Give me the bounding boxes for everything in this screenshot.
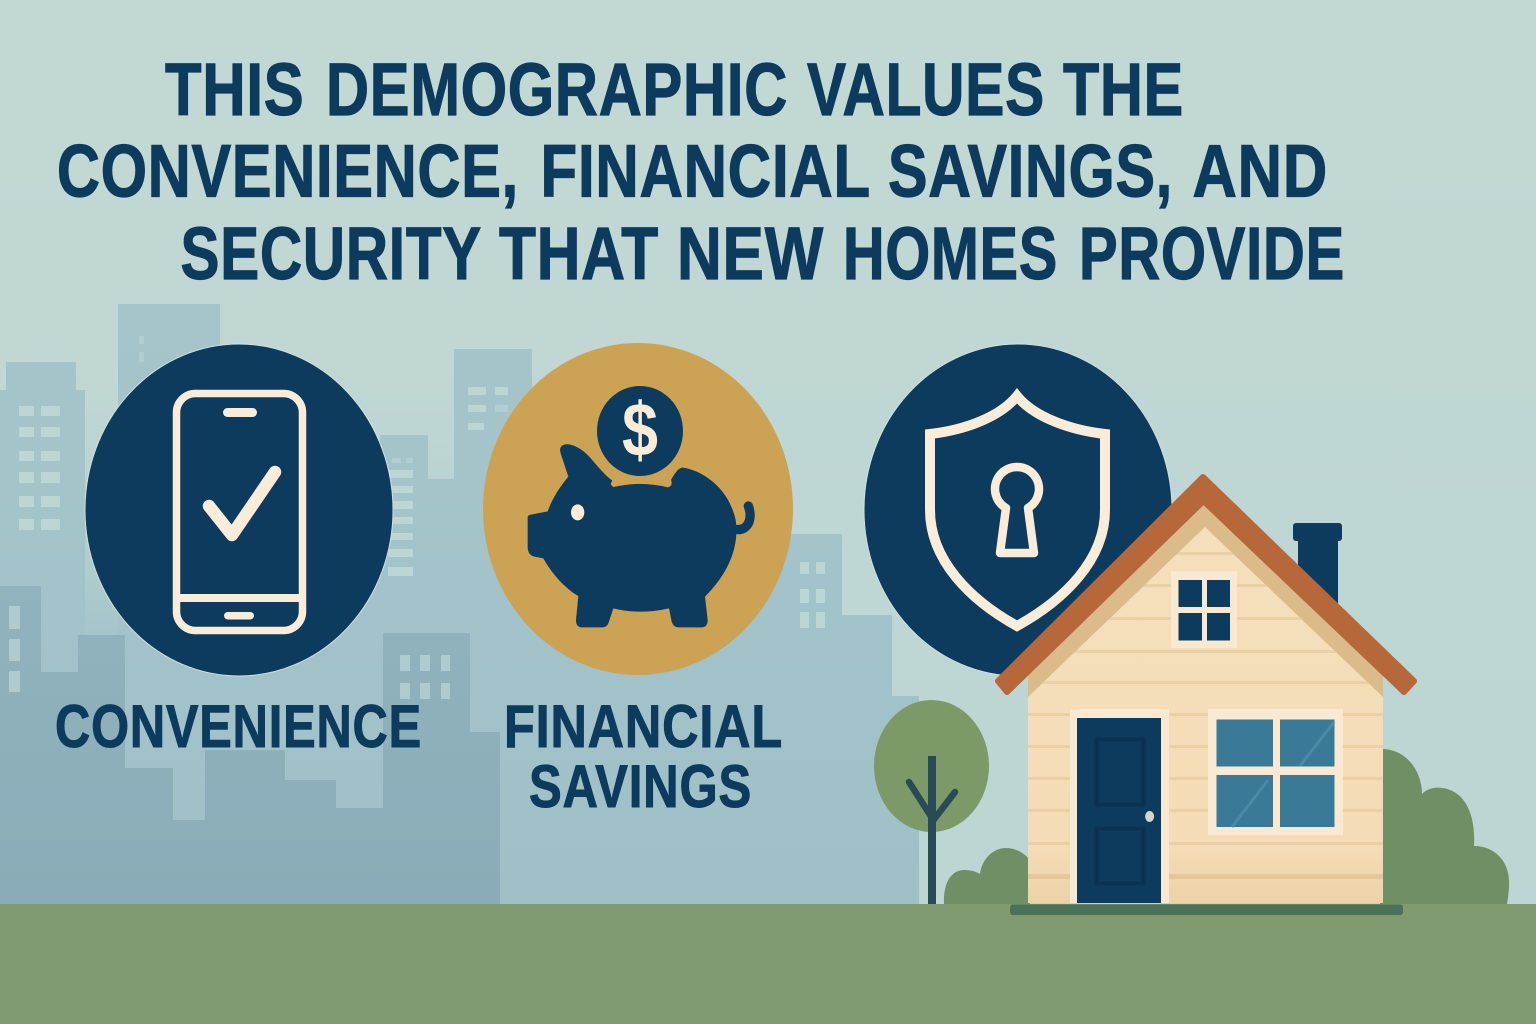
title: NEW (677, 212, 824, 295)
title: SECURITY (180, 212, 482, 295)
front window (1208, 709, 1343, 835)
porch slab (1010, 904, 1403, 915)
house (998, 477, 1414, 915)
icon: financial savings piggy bank (483, 343, 793, 675)
label: financial savings (504, 693, 783, 820)
tree (874, 700, 989, 904)
label: financial savings: SAVINGS (529, 753, 752, 820)
phone home bar (178, 594, 302, 602)
icon: security shield (864, 344, 1172, 676)
roof (998, 477, 1414, 692)
city skyline (0, 304, 919, 904)
attic window (1171, 572, 1237, 648)
right bush (1380, 749, 1509, 904)
front building windows (9, 606, 450, 699)
title (57, 48, 1345, 295)
phone outline (176, 394, 302, 630)
shield outline (930, 396, 1105, 626)
front buildings (0, 586, 500, 904)
dollar sign: $ (622, 388, 658, 473)
title: FINANCIAL (540, 130, 871, 212)
back building windows (19, 336, 825, 628)
left bush (944, 848, 1030, 904)
label: convenience: CONVENIENCE (55, 693, 422, 760)
ground (0, 904, 1536, 1024)
title: PROVIDE (1079, 212, 1345, 295)
keyhole (995, 467, 1039, 553)
back buildings (0, 304, 919, 904)
chimney (1293, 523, 1342, 605)
phone button (224, 612, 254, 620)
title: THAT (499, 212, 659, 295)
label: financial savings: FINANCIAL (504, 693, 783, 760)
title: HOMES (843, 212, 1058, 295)
coin (597, 386, 683, 476)
phone speaker (223, 408, 257, 417)
wall fascia (1028, 500, 1383, 720)
title: AND (1192, 130, 1328, 212)
title: THE (1063, 48, 1184, 131)
title: CONVENIENCE, (57, 130, 519, 212)
icon: convenience phone (85, 344, 393, 676)
piggy body (528, 444, 750, 627)
title: DEMOGRAPHIC (326, 48, 788, 131)
title: SAVINGS, (888, 130, 1173, 212)
wall (1028, 527, 1383, 903)
title: THIS (165, 48, 304, 131)
door (1070, 709, 1169, 903)
check mark (209, 472, 275, 535)
title: VALUES (807, 48, 1045, 131)
siding (1028, 552, 1383, 879)
